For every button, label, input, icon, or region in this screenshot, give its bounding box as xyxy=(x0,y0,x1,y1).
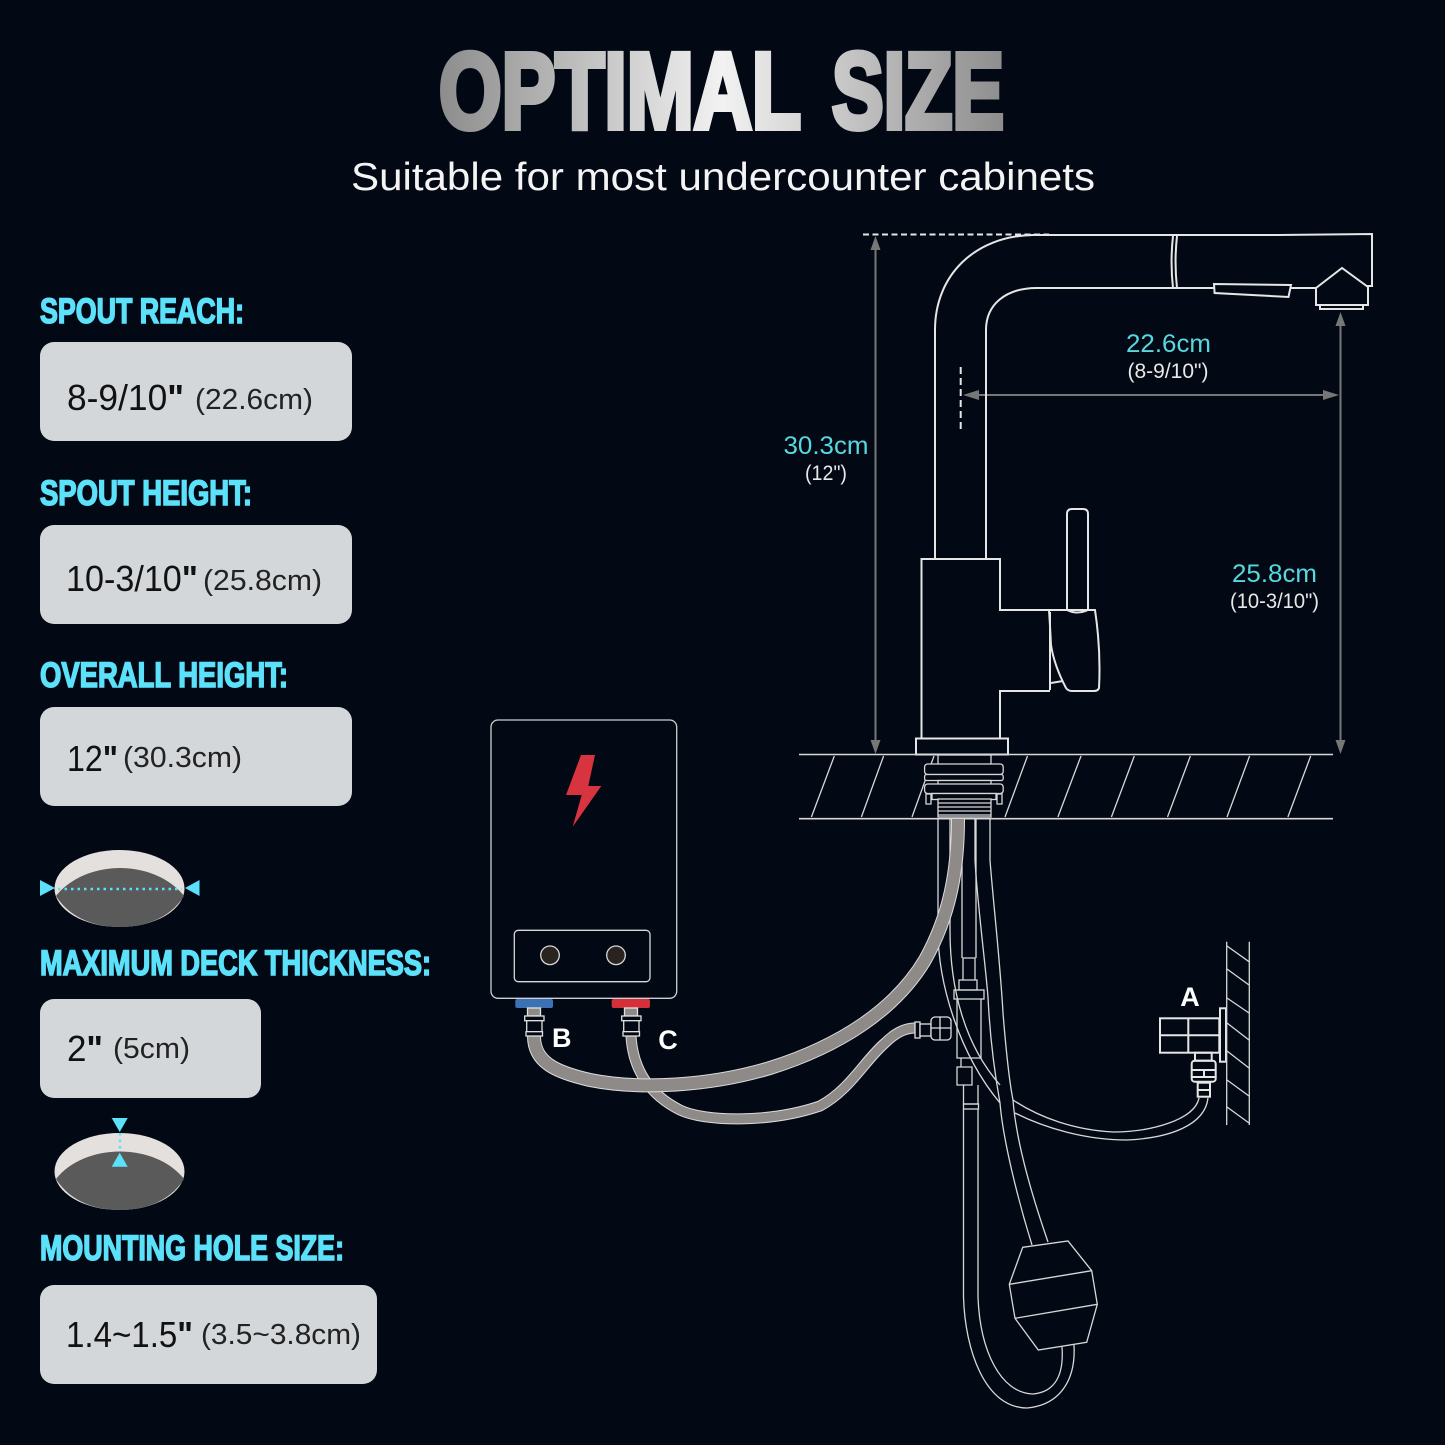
angle valve A xyxy=(1160,1008,1226,1097)
pull-down hose loop xyxy=(964,1109,1074,1408)
fitting B xyxy=(525,1008,544,1036)
hose weight xyxy=(1009,1241,1097,1350)
panel: mounting hole size: (3.5~3.8cm) xyxy=(201,1319,361,1351)
hose C connector xyxy=(915,1017,951,1040)
supply hose to valve A xyxy=(1013,1098,1208,1140)
panel: maximum deck thickness xyxy=(40,944,431,1098)
icon: deck thickness xyxy=(54,1118,184,1210)
label C: C xyxy=(658,1025,678,1055)
water heater xyxy=(491,720,677,1008)
water line fittings xyxy=(954,958,984,1109)
icon: lightning bolt xyxy=(566,755,601,827)
panel: spout height xyxy=(40,474,352,624)
title: OPTIMAL xyxy=(439,30,801,151)
panel: maximum deck thickness: (5cm) xyxy=(113,1033,190,1065)
panel: mounting hole size xyxy=(40,1229,377,1384)
panel: maximum deck thickness: MAXIMUM DECK THICKNESS: xyxy=(40,944,431,983)
panel: spout reach: 8-9/10" xyxy=(67,377,184,418)
faucet outline xyxy=(916,234,1372,754)
hose B xyxy=(534,819,958,1085)
mounting hardware xyxy=(925,755,1003,817)
dimension: spout reach label: 22.6cm xyxy=(1126,330,1211,358)
subtitle: Suitable for most undercounter cabinets xyxy=(351,156,1095,199)
dimension: spout reach label xyxy=(1126,330,1211,383)
dimension: overall height label xyxy=(784,432,868,485)
countertop xyxy=(799,754,1333,819)
panel: spout reach: SPOUT REACH: xyxy=(40,292,244,331)
panel: overall height: 12" xyxy=(67,738,118,779)
panel: spout height: SPOUT HEIGHT: xyxy=(40,474,252,513)
panel: mounting hole size: 1.4~1.5" xyxy=(66,1314,193,1355)
fitting C xyxy=(622,1008,641,1036)
dimension: spout height label: (10-3/10") xyxy=(1230,590,1319,613)
cold port xyxy=(515,999,553,1008)
dimension: spout reach label: (8-9/10") xyxy=(1128,360,1208,383)
dimension: spout height label: 25.8cm xyxy=(1232,560,1317,588)
control panel xyxy=(514,930,650,982)
icon: mounting hole width xyxy=(40,850,200,927)
dimension: spout height arrow xyxy=(1336,312,1346,754)
panel: overall height: OVERALL HEIGHT: xyxy=(40,656,288,695)
wall xyxy=(1227,942,1249,1125)
panel: spout reach: (22.6cm) xyxy=(195,384,313,416)
dimension: overall height label: 30.3cm xyxy=(784,432,868,460)
panel: spout height: (25.8cm) xyxy=(203,565,322,597)
label B: B xyxy=(552,1023,571,1053)
panel: overall height: (30.3cm) xyxy=(123,742,242,774)
panel: mounting hole size: MOUNTING HOLE SIZE: xyxy=(40,1229,344,1268)
under-counter pipes xyxy=(938,819,1048,1245)
dimension: spout reach arrow xyxy=(961,367,1339,430)
title: SIZE xyxy=(832,30,1004,151)
hose C xyxy=(631,1028,915,1119)
panel: spout reach xyxy=(40,292,352,441)
dimension: overall height arrow xyxy=(863,234,1049,754)
label A: A xyxy=(1180,982,1200,1012)
dimension: spout height label xyxy=(1230,560,1319,613)
panel: overall height xyxy=(40,656,352,806)
panel: maximum deck thickness: 2" xyxy=(67,1028,103,1069)
hot port xyxy=(612,999,650,1008)
panel: spout height: 10-3/10" xyxy=(66,558,198,599)
dimension: overall height label: (12") xyxy=(805,462,847,485)
